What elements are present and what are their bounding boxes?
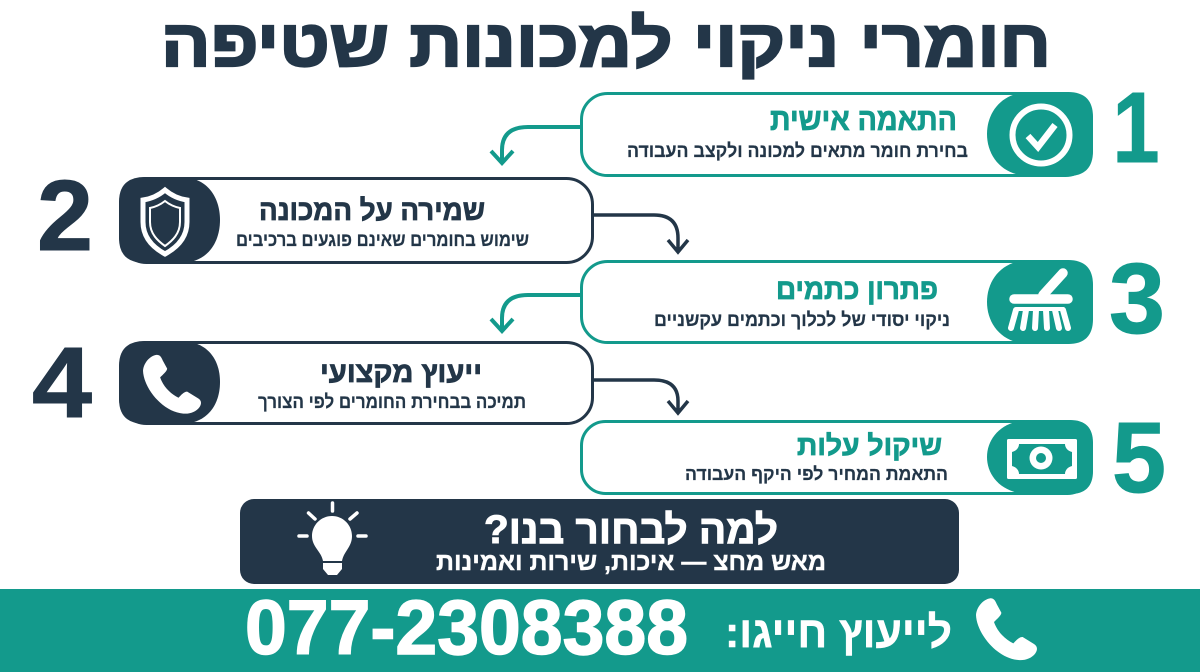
description: התאמת המחיר לפי היקף העבודה [685,464,948,484]
card outline [582,422,1092,494]
dark background [240,499,959,584]
panel: step 2 [119,177,592,263]
description: בחירת חומר מתאים למכונה ולקצב העבודה [627,141,968,162]
description: תמיכה בבחירת החומרים לפי הצורך [258,392,526,413]
tagline: מאש מחצ — איכות, שירות ואמינות [436,548,826,576]
icon tab [987,260,1093,344]
icon tab [119,177,220,263]
icon tab [119,341,220,424]
teal background [0,589,1200,672]
icon tab [987,92,1093,176]
arrow: step 4 to step 5 [593,380,688,413]
number 2: 2 [37,160,93,272]
panel: step 3 [582,260,1093,344]
icon: phone [976,598,1037,660]
panel: step 4 [119,341,592,424]
heading: התאמה אישית [770,102,957,137]
panel: step 1 [582,92,1093,176]
icon: shield [143,190,187,254]
icon: banknote [1007,439,1077,479]
number 1: 1 [1112,72,1160,184]
panel: step 5 [582,420,1093,494]
icon: phone [143,355,201,414]
arrow: step 1 to step 2 [491,127,580,163]
call label: לייעוץ חייגו: [725,608,952,657]
heading: שיקול עלות [797,430,942,461]
heading: שמירה על המכונה [259,195,485,227]
card outline [120,342,592,424]
card outline [582,94,1092,176]
card outline [582,262,1092,342]
heading: ייעוץ מקצועי [320,357,482,389]
arrow: step 3 to step 4 [491,295,580,331]
description: שימוש בחומרים שאינם פוגעים ברכיבים [236,230,529,251]
title: חומרי ניקוי למכונות שטיפה [161,6,1051,80]
number 3: 3 [1109,243,1165,355]
icon: check mark [1012,106,1070,164]
icon tab [987,420,1093,494]
card outline [120,178,592,262]
arrow: step 2 to step 3 [593,215,688,252]
description: ניקוי יסודי של לכלוך וכתמים עקשניים [654,310,950,331]
panel: why choose us [240,499,959,584]
number 4: 4 [32,327,92,439]
heading: פתרון כתמים [776,274,938,306]
phone number: 077-2308388 [245,585,688,671]
icon: brush [1011,273,1068,328]
number 5: 5 [1112,402,1166,514]
icon: light bulb [299,503,366,575]
footer band [0,585,1200,672]
heading: למה לבחור בנו? [484,508,778,552]
